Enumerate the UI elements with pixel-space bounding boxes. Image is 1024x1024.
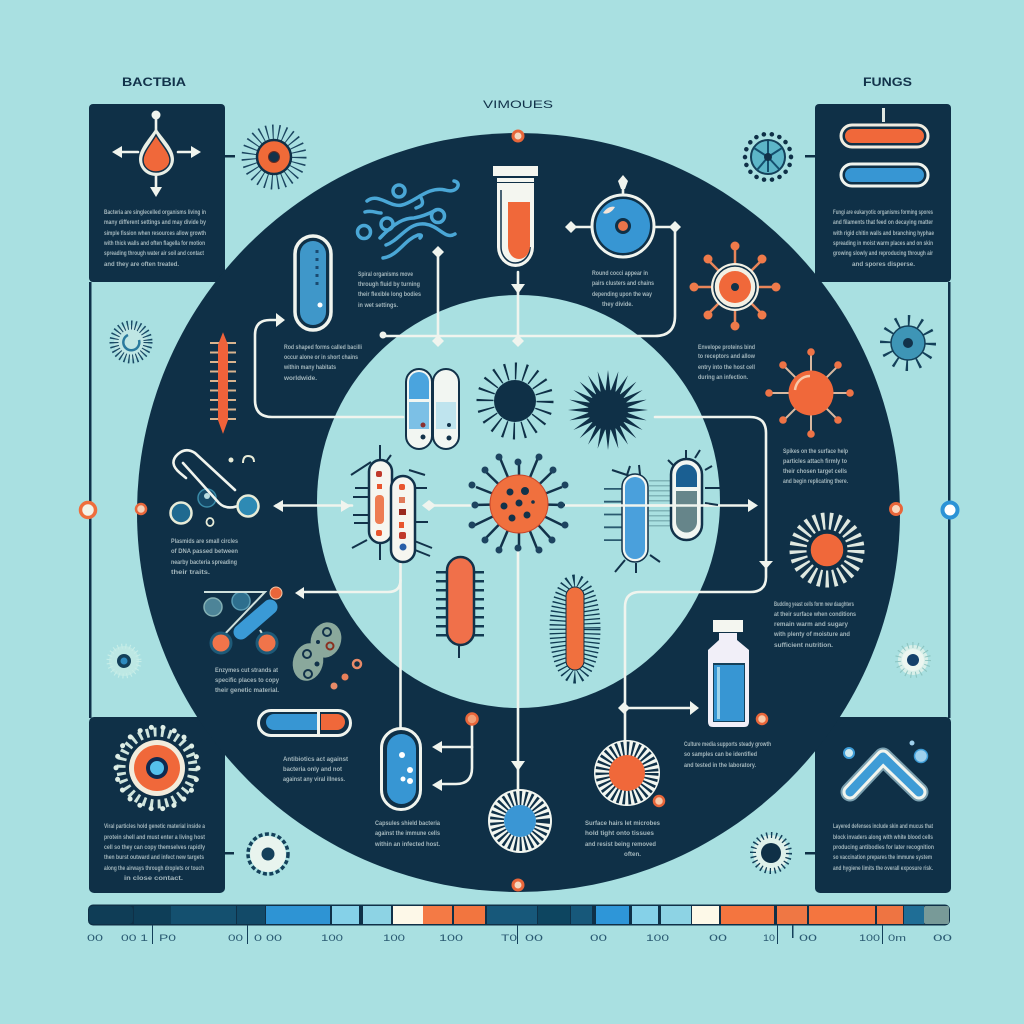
panel: bottom-right bbox=[815, 717, 951, 893]
timeline labels: 100 bbox=[646, 933, 669, 944]
icon: ticked dark cell bottom right bbox=[753, 835, 789, 871]
icon: small glowing cell right bbox=[898, 645, 928, 675]
icon: central orange virus bbox=[468, 454, 568, 554]
text block: waves note: in wet settings. bbox=[358, 302, 398, 309]
text block: bacteria panel bbox=[103, 209, 206, 268]
icon: knobbed panel virus bbox=[116, 727, 198, 809]
icon: dark virus bbox=[485, 371, 545, 431]
timeline labels: 00 bbox=[228, 933, 243, 944]
icon: blue capsule bbox=[382, 728, 420, 810]
icon: orange centipede bbox=[219, 335, 227, 431]
text block: bacteria panel: with thick walls and often flagella for motion bbox=[103, 240, 205, 247]
timeline labels: 00 1 bbox=[121, 933, 148, 944]
text block: sun note: sufficient nutrition. bbox=[774, 642, 833, 649]
timeline labels: 00 bbox=[87, 933, 103, 944]
text block: orange virus note: entry into the host cell bbox=[698, 364, 755, 371]
text block: bacteria panel: many different settings and may divide by bbox=[104, 219, 206, 226]
icon: dark star cell bbox=[568, 370, 648, 450]
text block: sun note: with plenty of moisture and bbox=[773, 631, 850, 638]
timeline labels: 100 bbox=[439, 933, 463, 944]
text block: orange virus note: to receptors and allow bbox=[698, 353, 756, 360]
icon: red bacteria pair bbox=[351, 445, 432, 562]
text block: orange urchin note bbox=[585, 820, 660, 858]
timeline ticks bbox=[152, 925, 883, 944]
text block: pill note: within many habitats bbox=[283, 364, 336, 371]
icon: orange sunburst bbox=[798, 521, 856, 579]
heading: bacteria: BACTBIA bbox=[122, 75, 186, 89]
text block: ball note: and begin replicating there. bbox=[783, 478, 848, 485]
text block: sun note: remain warm and sugary bbox=[774, 621, 848, 628]
connector: left elbow to pill bbox=[255, 313, 403, 417]
text block: bottle note: so samples can be identified bbox=[684, 751, 757, 758]
text block: bottle note: and tested in the laboratory. bbox=[684, 762, 756, 769]
text block: orange urchin note: often. bbox=[624, 851, 641, 858]
icon: orange virus top right bbox=[690, 242, 780, 330]
text block: paperclip note: their traits. bbox=[171, 569, 210, 576]
text block: target note bbox=[592, 270, 654, 308]
text block: fungi panel: with rigid chitin walls and branching hyphae bbox=[832, 230, 934, 237]
text block: scissors note bbox=[215, 667, 279, 694]
text block: paperclip note: nearby bacteria spreading bbox=[171, 559, 237, 566]
text block: fungi panel: and spores disperse. bbox=[852, 261, 915, 268]
connector: central drop bbox=[511, 552, 525, 792]
timeline labels: 100 bbox=[859, 933, 880, 944]
timeline labels: 00 bbox=[525, 933, 543, 944]
text block: two-tone pill note: against any viral illness. bbox=[283, 776, 345, 783]
connector: central axis bbox=[273, 499, 758, 512]
heading: viruses: VIMOUES bbox=[483, 99, 553, 111]
text block: bottom-right panel: Layered defenses include skin and mucus that bbox=[833, 823, 934, 830]
text block: bottom-right panel: and hygiene limits the overall exposure risk. bbox=[833, 865, 933, 872]
text block: sun note: Budding yeast cells form new daughters bbox=[774, 601, 854, 608]
text block: bottom-right panel: producing antibodies for later recognition bbox=[833, 844, 934, 851]
rail nodes bbox=[80, 131, 958, 890]
text block: paperclip note bbox=[171, 538, 238, 576]
text block: pill note: worldwide. bbox=[283, 375, 317, 382]
inner circle bbox=[317, 295, 720, 708]
text block: fungi panel: growing slowly and reproducing through air bbox=[833, 250, 933, 257]
timeline labels: 0 00 bbox=[254, 933, 282, 944]
side rail left bbox=[89, 282, 92, 718]
icon: orange urchin bbox=[594, 740, 660, 806]
icon: small glowing cell left bbox=[109, 646, 139, 676]
text block: bottom-right panel bbox=[833, 823, 934, 872]
panel: bacteria top-left bbox=[89, 104, 225, 282]
timeline labels: 00 bbox=[933, 933, 952, 944]
icon: test tube bbox=[493, 166, 538, 267]
panel: fungi top-right bbox=[815, 104, 951, 282]
orange dots trail bbox=[330, 660, 361, 690]
timeline labels: 100 bbox=[321, 933, 343, 944]
text block: scissors note: Enzymes cut strands at bbox=[215, 667, 279, 674]
timeline labels: P0 bbox=[159, 933, 176, 944]
text block: paperclip note: of DNA passed between bbox=[171, 548, 238, 555]
text block: bacteria panel: simple fission when resources allow growth bbox=[104, 230, 206, 237]
text block: fungi panel: and filaments that feed on decaying matter bbox=[833, 219, 933, 226]
icon: small ticked cell left bbox=[114, 325, 148, 359]
text block: scissors note: their genetic material. bbox=[215, 687, 279, 694]
text block: bacteria panel: spreading through water air soil and contact bbox=[104, 250, 205, 257]
text block: bottle note bbox=[684, 741, 771, 769]
small panel links bbox=[225, 155, 815, 854]
text block: ball note: Spikes on the surface help bbox=[783, 448, 848, 455]
timeline labels: 0m bbox=[888, 933, 906, 944]
text block: bottom-right panel: so vaccination prepares the immune system bbox=[833, 854, 932, 861]
icon: blue circle target bbox=[565, 175, 670, 257]
text block: orange urchin note: hold tight onto tissues bbox=[585, 830, 654, 837]
timeline labels: T0 bbox=[501, 933, 517, 944]
orange dot near bottle bbox=[757, 714, 767, 724]
text block: target note: Round cocci appear in bbox=[592, 270, 648, 277]
text block: pill note: Rod shaped forms called bacilli bbox=[284, 344, 362, 351]
text block: capsule note bbox=[374, 820, 440, 848]
text block: sun note: at their surface when conditions bbox=[774, 611, 856, 618]
text block: fungi panel: spreading in moist warm places and on skin bbox=[833, 240, 933, 247]
text block: pill note: occur alone or in short chains bbox=[284, 354, 358, 361]
timeline labels bbox=[87, 933, 952, 944]
timeline labels: 00 bbox=[799, 933, 817, 944]
icon: spiky orange cell bbox=[249, 132, 299, 182]
timeline labels: 00 bbox=[709, 933, 727, 944]
orange dot near urchin bbox=[654, 796, 664, 806]
icon: orange pill bbox=[841, 108, 928, 147]
outer ring bbox=[137, 133, 900, 892]
text block: two-tone pill note: Antibiotics act against bbox=[283, 756, 349, 763]
text block: fungi panel: Fungi are eukaryotic organisms forming spores bbox=[833, 209, 933, 216]
text block: bottom-left panel bbox=[104, 823, 206, 882]
text block: capsule note: against the immune cells bbox=[375, 830, 440, 837]
timeline bar bbox=[88, 904, 950, 926]
timeline labels: 10 bbox=[763, 933, 775, 944]
text block: orange virus note: Envelope proteins bind bbox=[698, 344, 755, 351]
text block: bottom-left panel: protein shell and must enter a living host bbox=[104, 834, 206, 841]
text block: ball note bbox=[783, 448, 848, 485]
connector: capsule branch bbox=[432, 722, 472, 791]
text block: target note: they divide. bbox=[602, 301, 633, 308]
text block: two-tone pill note: bacteria only and not bbox=[283, 766, 343, 773]
text block: bottom-left panel: along the airways through droplets or touch bbox=[104, 865, 204, 872]
icon: teal blobs bbox=[289, 618, 346, 684]
text block: waves note: their flexible long bodies bbox=[358, 291, 421, 298]
text block: fungi panel bbox=[832, 209, 934, 268]
icon: blue bacillus and capsule bbox=[604, 450, 720, 573]
text block: bottom-left panel: cell so they can copy themselves rapidly bbox=[104, 844, 205, 851]
text block: bottom-left panel: in close contact. bbox=[124, 875, 183, 882]
connector: top hub bbox=[380, 221, 681, 347]
icon: paperclip molecules bbox=[170, 450, 258, 526]
panel: bottom-left bbox=[89, 717, 225, 893]
orange dot on capsule branch bbox=[466, 714, 478, 724]
text block: sun note bbox=[773, 601, 856, 649]
text block: pill note bbox=[283, 344, 362, 382]
text block: scissors note: specific places to copy bbox=[215, 677, 279, 684]
text block: target note: depending upon the way bbox=[592, 291, 652, 298]
icon: teal spiky cell bbox=[887, 322, 929, 364]
text block: bacteria panel: Bacteria are singlecelled organisms living in bbox=[104, 209, 206, 216]
text block: capsule note: within an infected host. bbox=[374, 841, 440, 848]
icon: vial bottle bbox=[708, 620, 749, 727]
icon: blue urchin bbox=[488, 789, 552, 853]
text block: waves note bbox=[358, 271, 421, 309]
text block: waves note: through fluid by turning bbox=[358, 281, 420, 288]
icon: two-tone pill bbox=[258, 710, 350, 736]
text block: orange urchin note: and resist being removed bbox=[585, 841, 656, 848]
icon: scissors molecule bbox=[204, 587, 282, 653]
icon: blue pill upright bbox=[295, 236, 331, 330]
icon: orange ball with knobs bbox=[765, 348, 854, 438]
side rail right bbox=[948, 282, 950, 718]
text block: ball note: particles attach firmly to bbox=[783, 458, 847, 465]
icon: small dotted cell left bottom bbox=[248, 834, 288, 874]
icon: orange drop with arrows bbox=[112, 110, 201, 197]
text block: bottle note: Culture media supports steady growth bbox=[684, 741, 771, 748]
timeline labels: 00 bbox=[590, 933, 607, 944]
text block: bottom-left panel: Viral particles hold genetic material inside a bbox=[104, 823, 205, 830]
text block: target note: pairs clusters and chains bbox=[592, 280, 654, 287]
text block: waves note: Spiral organisms move bbox=[358, 271, 413, 278]
heading: fungi: FUNGS bbox=[863, 75, 912, 89]
text block: two-tone pill note bbox=[283, 756, 349, 783]
icon: blue waves bbox=[358, 181, 458, 258]
text block: orange virus note bbox=[698, 344, 756, 381]
icon: blue chevron bbox=[844, 740, 928, 792]
connector: right elbow to bottle bbox=[618, 417, 773, 742]
text block: ball note: their chosen target cells bbox=[783, 468, 847, 475]
icon: twin capsules bbox=[406, 369, 459, 449]
text block: orange urchin note: Surface hairs let microbes bbox=[585, 820, 660, 827]
icon: orange bacillus bbox=[447, 557, 474, 658]
text block: bacteria panel: and they are often treated. bbox=[104, 261, 179, 268]
text block: orange virus note: during an infection. bbox=[698, 374, 748, 381]
text block: paperclip note: Plasmids are small circles bbox=[171, 538, 238, 545]
icon: blue pill bbox=[841, 164, 928, 186]
text block: bottom-left panel: then burst outward and infect new targets bbox=[104, 854, 204, 861]
connector: left drop and branch bbox=[295, 563, 400, 728]
icon: netted virus bbox=[745, 134, 791, 180]
text block: bottom-right panel: block invaders along with white blood cells bbox=[833, 834, 933, 841]
icon: hairy orange rod bbox=[558, 583, 592, 675]
text block: capsule note: Capsules shield bacteria bbox=[375, 820, 440, 827]
timeline labels: 100 bbox=[383, 933, 405, 944]
